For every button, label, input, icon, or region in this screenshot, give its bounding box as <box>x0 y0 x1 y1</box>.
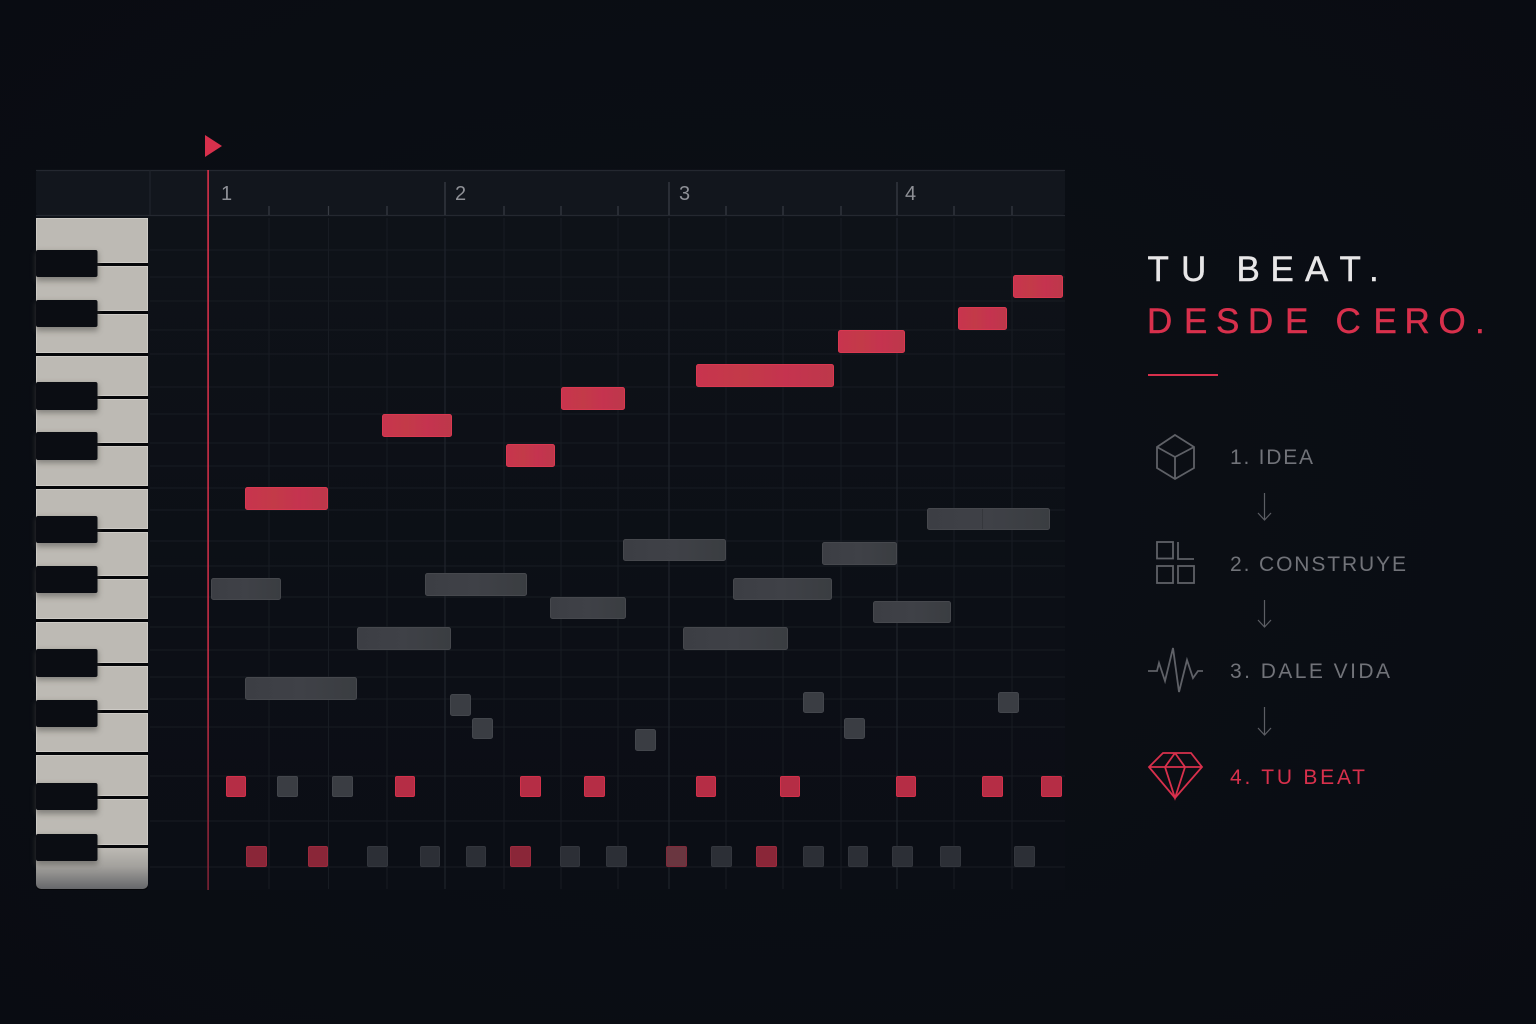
step 2 label: 2. CONSTRUYE <box>1230 553 1406 576</box>
bar number 2: 2 <box>455 183 466 205</box>
step 1 label: 1. IDEA <box>1230 446 1313 469</box>
step 2 <box>1157 542 1406 583</box>
panel: piano roll <box>36 170 1065 890</box>
step 1 <box>1157 435 1313 479</box>
bar number 4: 4 <box>905 183 916 205</box>
playhead line <box>207 170 209 890</box>
roll background <box>36 215 1065 890</box>
icon: waveform <box>1148 648 1203 692</box>
step 3 label: 3. DALE VIDA <box>1230 660 1390 683</box>
step 3 <box>1148 648 1390 692</box>
step 4 <box>1149 753 1365 798</box>
icon: diamond <box>1149 753 1202 798</box>
icon: playhead triangle <box>205 135 222 157</box>
drum row 2 <box>246 846 1034 866</box>
step 4 label: 4. TU BEAT <box>1230 766 1365 789</box>
arrow 2 <box>1258 600 1271 627</box>
bar number 1: 1 <box>221 183 232 205</box>
title line 1: TU BEAT. <box>1148 250 1379 289</box>
icon: blocks <box>1157 542 1194 583</box>
title line 2: DESDE CERO. <box>1147 302 1485 341</box>
bar ruler header <box>36 170 1065 216</box>
melody notes (red) <box>246 276 1062 510</box>
arrow 1 <box>1258 493 1271 520</box>
title <box>1147 250 1485 341</box>
steps list <box>1148 435 1406 798</box>
bar number 3: 3 <box>679 183 690 205</box>
accent rule <box>1148 374 1218 376</box>
icon: cube <box>1157 435 1194 479</box>
drum row 1 <box>226 776 1062 796</box>
piano keyboard <box>36 218 148 890</box>
arrow 3 <box>1258 707 1271 735</box>
harmony notes (gray) <box>212 508 1050 750</box>
